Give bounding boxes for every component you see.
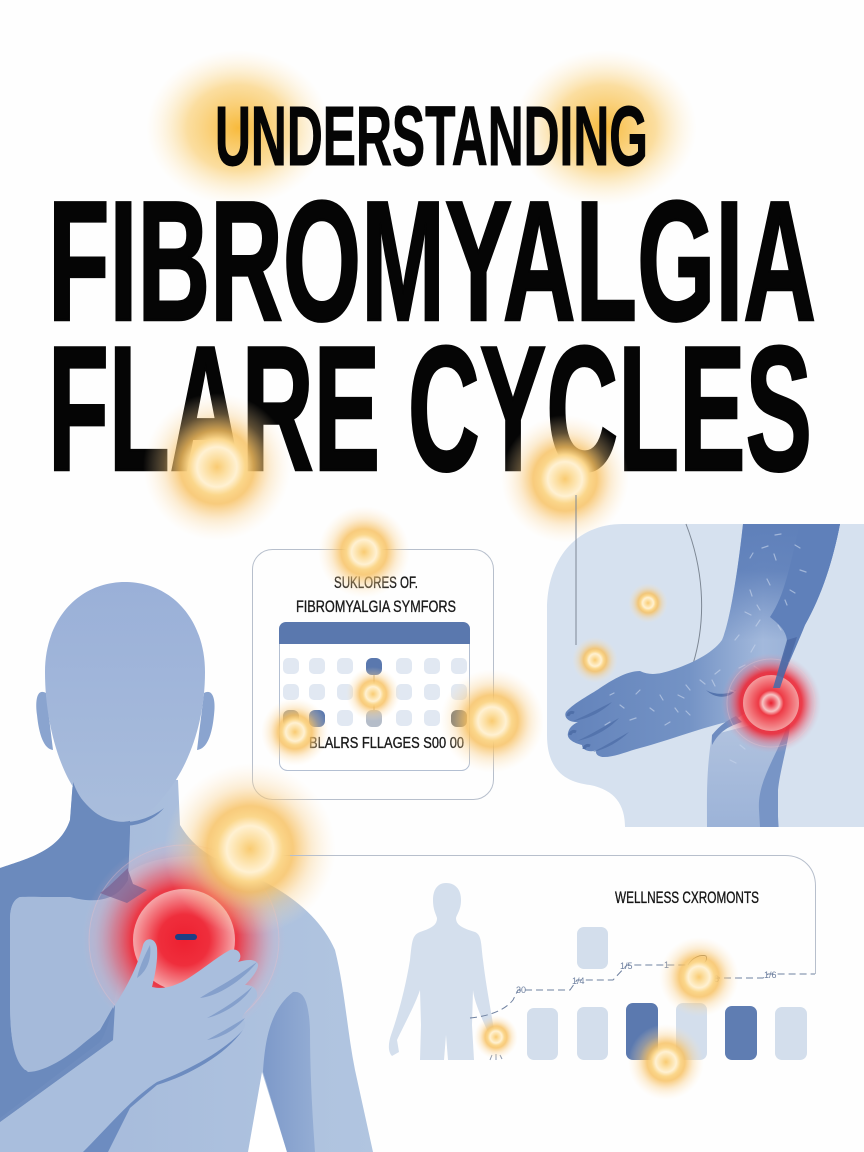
- connector line: [575, 495, 577, 645]
- bar five: [725, 1006, 757, 1060]
- small hand mark: [490, 1054, 502, 1060]
- ear left: [36, 692, 53, 750]
- arm dark edge: [0, 1005, 115, 1122]
- figure: person holding chest: [0, 582, 373, 1152]
- glow: calendar top: [318, 506, 410, 598]
- panel outline: [277, 856, 816, 974]
- glow: title left node: [143, 393, 291, 541]
- ear right: [197, 692, 215, 750]
- trend labels: 30: [516, 985, 526, 995]
- glow: calendar center: [346, 667, 400, 721]
- chest patch: [10, 897, 135, 1072]
- pain glow: [82, 838, 286, 1042]
- upper arm dark strip: [770, 524, 840, 688]
- title: [48, 89, 816, 508]
- bar three: [626, 1003, 658, 1060]
- trend labels: 1/4: [572, 976, 585, 986]
- shoulder shadow: [0, 780, 130, 1122]
- panel heading: WELLNESS CXROMONTS: [615, 889, 759, 907]
- glow: calendar left: [261, 698, 329, 766]
- pain mark: [175, 934, 197, 940]
- fingernails: [568, 712, 590, 749]
- head: [45, 582, 205, 822]
- trend labels: 1/6: [764, 970, 777, 980]
- pain halo ring: [89, 845, 279, 1035]
- glow: chart lower: [628, 1024, 704, 1100]
- connector line from shoulder: [290, 854, 400, 856]
- neck shadow wedge: [100, 833, 147, 903]
- calendar flare days: [283, 658, 467, 727]
- calendar caption: BLALRS FLLAGES S00 00: [309, 735, 464, 752]
- wrist shadow: [712, 716, 742, 745]
- upper arm shade: [722, 524, 840, 640]
- curved line: [686, 524, 702, 664]
- glow: chart upper: [659, 937, 739, 1017]
- glow: panel lower node: [572, 637, 618, 683]
- card outline: [252, 550, 494, 800]
- chin shadow: [73, 782, 164, 826]
- silhouette figure: [389, 883, 494, 1060]
- hand undershadow: [83, 1030, 243, 1152]
- glow: behind title left: [146, 50, 330, 206]
- dashed trend line: [470, 965, 815, 1018]
- calendar header: [279, 622, 470, 644]
- trend labels: 1: [664, 960, 669, 970]
- panel: symptom calendar: [252, 550, 494, 800]
- glow: calendar right: [440, 669, 544, 773]
- glow: title right node: [501, 415, 629, 543]
- trend labels: 8: [714, 974, 719, 984]
- finger creases: [573, 690, 736, 752]
- panel: wellness chart: [277, 856, 816, 1060]
- panel background: [547, 524, 864, 827]
- pain core: [133, 889, 235, 991]
- thumb crease: [137, 945, 150, 978]
- pain glow: [721, 653, 821, 753]
- glow: shoulder node: [164, 763, 336, 935]
- skin speckles: [605, 534, 806, 763]
- glow: figure hand: [474, 1015, 518, 1059]
- calendar day cells: [283, 658, 467, 726]
- pain core: [743, 675, 799, 731]
- collarbone: [128, 856, 240, 920]
- upper arm and hand: [565, 524, 840, 757]
- trend labels: [516, 960, 777, 995]
- bar four: [676, 1003, 707, 1060]
- small squiggle: [688, 955, 707, 966]
- bar six: [775, 1007, 807, 1060]
- finger creases: [200, 962, 257, 1040]
- pain halo ring: [727, 659, 815, 747]
- card heading line two: FIBROMYALGIA SYMFORS: [296, 597, 456, 616]
- panel: arm with flare: [547, 495, 864, 827]
- armpit gap: [248, 1072, 287, 1152]
- torso: [0, 780, 373, 1152]
- upper box: [577, 927, 608, 969]
- dark tendon: [773, 637, 797, 688]
- glow: panel upper node: [628, 583, 668, 623]
- bar two: [577, 1007, 608, 1060]
- calendar frame: [280, 622, 470, 770]
- bar one: [527, 1008, 558, 1060]
- inner arm shade: [263, 992, 315, 1152]
- lower arm: [707, 715, 790, 827]
- forearm and hand: [0, 939, 258, 1152]
- lower arm dark strip: [759, 725, 790, 827]
- glow: behind title right: [513, 50, 697, 206]
- trend labels: 1/5: [620, 961, 633, 971]
- card heading line one: SUKLORES OF.: [334, 573, 418, 592]
